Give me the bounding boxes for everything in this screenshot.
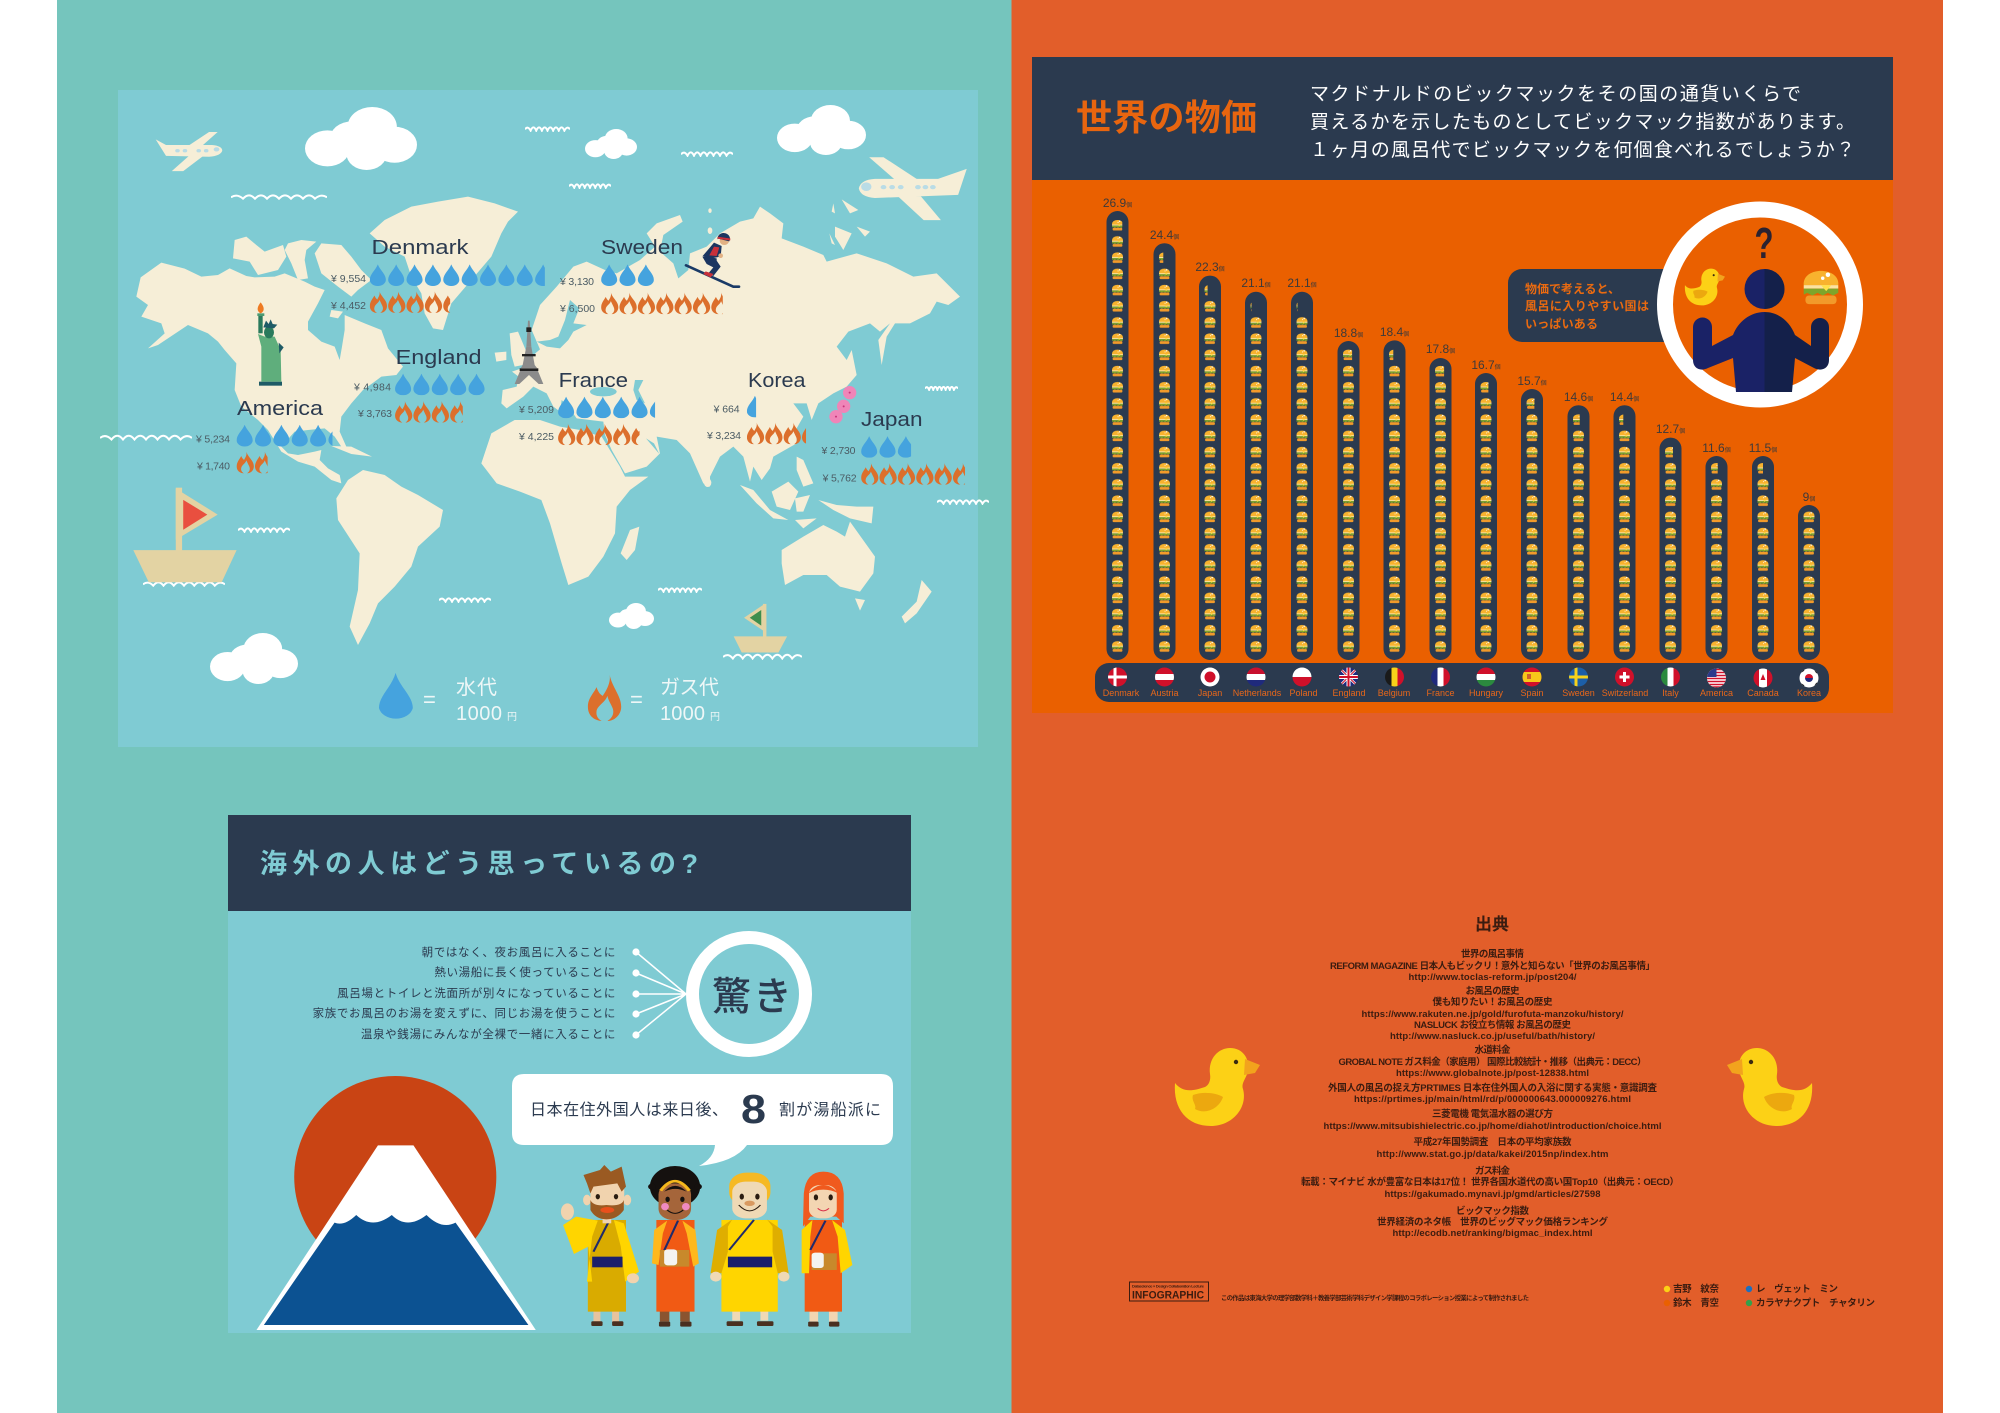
intro text: 買えるかを示したものとしてビックマック指数があります。 [1310, 111, 1855, 133]
sources list: NASLUCK お役立ち情報 お風呂の歴史 [1414, 1019, 1571, 1031]
icon: plane large [859, 157, 967, 220]
panel: orange background [1012, 0, 1943, 1413]
flag labels: Belgium [1378, 688, 1410, 698]
sources list: 三菱電機 電気温水器の選び方 [1432, 1108, 1553, 1120]
bar: Italy 12.7: 12.7個 [1656, 422, 1685, 436]
flag labels: Japan [1198, 688, 1222, 698]
surprise list: 朝ではなく、夜お風呂に入ることに [422, 946, 616, 959]
sources list [1301, 948, 1679, 1239]
sources list: 世界経済のネタ帳 世界のビッグマック価格ランキング [1377, 1216, 1608, 1228]
surprise ring [692, 938, 806, 1050]
flag labels [1103, 688, 1821, 698]
waves [100, 127, 989, 659]
bar: America 11.6 [1702, 441, 1731, 660]
bar: Poland 21.1 [1287, 276, 1317, 660]
heading: 海外の人はどう思っているの? [260, 849, 698, 879]
icon: cherry blossoms [829, 386, 856, 423]
sources list: 転載：マイナビ 水が豊富な日本は17位！ 世界各国水道代の高い国Top10（出典元：OECD） [1301, 1176, 1679, 1188]
flag labels: Italy [1662, 688, 1679, 698]
icon: eiffel tower [515, 321, 543, 384]
amounts: ¥ 6,500 [559, 303, 595, 315]
speech bubble: 日本在住外国人は来日後、 [530, 1101, 728, 1119]
icon: small boat [734, 604, 787, 652]
amounts: ¥ 4,984 [353, 382, 391, 394]
flag labels: Sweden [1562, 688, 1595, 698]
icon: legend flame [588, 675, 621, 721]
bar: Poland 21.1: 21.1個 [1287, 276, 1317, 290]
speech bubble: 割が湯船派に [779, 1101, 881, 1119]
heading bar [1032, 57, 1893, 180]
sources list: 世界の風呂事情 [1461, 948, 1524, 960]
bar: Spain 15.7: 15.7個 [1517, 374, 1547, 388]
footer logo [1130, 1282, 1208, 1302]
sources list: https://www.globalnote.jp/post-12838.html [1396, 1068, 1589, 1079]
flag strip [1095, 663, 1829, 702]
sources list: 外国人の風呂の捉え方PRTIMES 日本在住外国人の入浴に関する実態・意識調査 [1328, 1082, 1657, 1094]
country names: France [559, 370, 628, 392]
sources list: https://prtimes.jp/main/html/rd/p/000000643.000009276.html [1354, 1094, 1631, 1105]
bar: America 11.6: 11.6個 [1702, 441, 1731, 455]
bar: Japan 22.3: 22.3個 [1195, 260, 1225, 274]
chart: water and gas rows [237, 264, 970, 485]
flag labels: Hungary [1469, 688, 1504, 698]
country names: Korea [748, 370, 806, 392]
icon: plane small [156, 132, 222, 171]
person: blond man [710, 1173, 789, 1326]
amounts: ¥ 3,234 [706, 430, 741, 442]
bar: Japan 22.3 [1195, 260, 1225, 660]
sources list: 水道料金 [1474, 1044, 1511, 1056]
flag labels: Netherlands [1233, 688, 1282, 698]
country names: America [237, 398, 324, 420]
surprise list: 熱い湯船に長く使っていることに [434, 965, 616, 979]
bar: Sweden 14.6 [1564, 390, 1593, 660]
icon: legend drop [379, 673, 413, 719]
amounts: ¥ 3,763 [357, 408, 392, 420]
callout bubble: 風呂に入りやすい国は [1525, 299, 1649, 313]
panel: opinions from abroad [228, 815, 911, 1333]
bar: France 17.8 [1426, 342, 1455, 660]
icon: statue of liberty [257, 302, 284, 386]
footer note: この作品は東海大学の理学部数学科＋教養学部芸術学科デザイン学課程のコラボレーション授業によって制作されました [1221, 1293, 1529, 1302]
surprise list: 風呂場とトイレと洗面所が別々になっていることに [337, 986, 616, 1000]
credits: カラヤナクプト チャタリン [1756, 1297, 1875, 1309]
bar: Hungary 16.7: 16.7個 [1471, 358, 1501, 372]
flag labels: America [1700, 688, 1733, 698]
surprise list: 家族でお風呂のお湯を変えずに、同じお湯を使うことに [313, 1006, 616, 1020]
intro text: １ヶ月の風呂代でビックマックを何個食べれるでしょうか？ [1310, 139, 1855, 161]
bar: Denmark 26.9: 26.9個 [1103, 196, 1132, 210]
legend: 円 [710, 712, 720, 723]
speech bubble: 8 [741, 1086, 766, 1132]
clouds [210, 105, 866, 684]
footer logo: Datascience × Design Collaboration Lecture [1132, 1284, 1205, 1288]
mount fuji [256, 1076, 536, 1330]
amounts [195, 273, 857, 485]
sources list: http://www.nasluck.co.jp/useful/bath/history/ [1390, 1031, 1595, 1042]
sources list: https://www.mitsubishielectric.co.jp/home/diahot/introduction/choice.html [1324, 1121, 1662, 1132]
bar: Sweden 14.6: 14.6個 [1564, 390, 1593, 404]
chart: burgers per bath cost [1103, 196, 1820, 660]
bar: Spain 15.7 [1517, 374, 1547, 660]
heading: 世界の物価 [1076, 97, 1257, 138]
bar: France 17.8: 17.8個 [1426, 342, 1455, 356]
panel: world map [100, 90, 989, 747]
callout bubble [1508, 269, 1688, 342]
bar: Italy 12.7 [1656, 422, 1685, 660]
bar: Denmark 26.9 [1103, 196, 1132, 660]
country names: Denmark [372, 237, 470, 259]
legend: 1000 [660, 703, 705, 725]
bar: Switzerland 14.4: 14.4個 [1610, 390, 1639, 404]
flag labels: Korea [1797, 688, 1821, 698]
illustration: mount fuji and people [256, 1076, 852, 1330]
connectors [632, 948, 686, 1039]
sources list: 僕も知りたい！お風呂の歴史 [1432, 996, 1553, 1008]
bar: England 18.8: 18.8個 [1334, 326, 1363, 340]
illustration: person thinking [1665, 210, 1855, 400]
person: woman with curly hair [648, 1166, 702, 1327]
flag labels: Spain [1520, 688, 1544, 698]
legend: 1000 [456, 703, 502, 725]
flag labels: England [1332, 688, 1366, 698]
map illustrations [133, 132, 970, 721]
footer logo: INFOGRAPHIC [1132, 1290, 1204, 1302]
bar: Netherlands 21.1 [1241, 276, 1271, 660]
surprise ring: 驚き [712, 976, 792, 1019]
amounts: ¥ 9,554 [330, 273, 366, 285]
legend: 水代 [456, 676, 497, 699]
legend: ガス代 [660, 676, 719, 699]
callout bubble: いっぱいある [1525, 317, 1598, 331]
bar: Austria 24.4 [1150, 228, 1179, 660]
icon: rubber duck left [1175, 1048, 1260, 1126]
flag labels: Poland [1289, 688, 1318, 698]
callout bubble: 物価で考えると、 [1525, 281, 1620, 296]
amounts: ¥ 4,225 [518, 431, 554, 443]
person: bearded man [561, 1165, 639, 1326]
legend [423, 676, 720, 725]
bar: Korea 9 [1798, 490, 1820, 660]
intro text: マクドナルドのビックマックをその国の通貨いくらで [1310, 83, 1801, 105]
icon: large boat [133, 488, 237, 582]
illustration: person thinking: ? [1754, 219, 1774, 268]
sources list: https://www.rakuten.ne.jp/gold/furofuta-manzoku/history/ [1362, 1009, 1624, 1020]
legend: 円 [507, 712, 517, 723]
bar: Korea 9: 9個 [1803, 490, 1815, 504]
bar: Switzerland 14.4 [1610, 390, 1639, 660]
flag labels: Canada [1747, 688, 1779, 698]
sources list: http://www.toclas-reform.jp/post204/ [1408, 972, 1577, 983]
bar: Belgium 18.4: 18.4個 [1380, 325, 1409, 339]
bar: Belgium 18.4 [1380, 325, 1409, 660]
sources list: 平成27年国勢調査 日本の平均家族数 [1414, 1136, 1572, 1148]
amounts: ¥ 5,234 [195, 434, 230, 446]
speech bubble [512, 1074, 893, 1166]
amounts: ¥ 5,209 [518, 404, 554, 416]
country names: Japan [861, 409, 922, 431]
flag labels: Austria [1150, 688, 1179, 698]
country names [237, 237, 922, 431]
amounts: ¥ 4,452 [330, 300, 366, 312]
amounts: ¥ 1,740 [196, 460, 230, 472]
bar: Netherlands 21.1: 21.1個 [1241, 276, 1271, 290]
bar: Canada 11.5 [1749, 441, 1777, 660]
sources list: http://www.stat.go.jp/data/kakei/2015np/index.htm [1376, 1149, 1608, 1160]
sources list: お風呂の歴史 [1466, 985, 1520, 997]
country names: England [396, 347, 482, 369]
credits: レ ヴェット ミン [1756, 1283, 1838, 1295]
panel: teal background [57, 0, 1012, 1413]
land: eurasia, africa and oceania [481, 199, 960, 623]
amounts: ¥ 3,130 [559, 276, 594, 288]
sources list: ガス料金 [1475, 1165, 1510, 1177]
country names: Sweden [601, 237, 683, 259]
credits [1664, 1283, 1875, 1309]
sources list: https://gakumado.mynavi.jp/gmd/articles/27598 [1384, 1189, 1600, 1200]
amounts: ¥ 5,762 [822, 473, 857, 485]
bar: Hungary 16.7 [1471, 358, 1501, 660]
surprise list [313, 946, 616, 1041]
bar: Canada 11.5: 11.5個 [1749, 441, 1777, 455]
credits: 吉野 紋奈 [1673, 1283, 1719, 1295]
credits: 鈴木 青空 [1673, 1297, 1719, 1309]
bar: England 18.8 [1334, 326, 1363, 660]
amounts: ¥ 2,730 [820, 445, 856, 457]
land: americas and greenland [136, 197, 531, 645]
sources list: ビックマック指数 [1456, 1205, 1529, 1217]
flag labels: Denmark [1103, 688, 1140, 698]
amounts: ¥ 664 [713, 404, 740, 416]
sources list: GROBAL NOTE ガス料金（家庭用） 国際比較統計・推移（出典元：DECC） [1338, 1056, 1646, 1068]
surprise list: 温泉や銭湯にみんなが全裸で一緒に入ることに [361, 1027, 616, 1041]
intro text [1310, 83, 1855, 161]
sources list: http://ecodb.net/ranking/bigmac_index.html [1392, 1228, 1592, 1239]
heading bar [228, 815, 911, 911]
flag labels: France [1426, 688, 1455, 698]
flag labels: Switzerland [1602, 688, 1648, 698]
icon: skier [686, 233, 739, 287]
legend: = [423, 687, 436, 712]
sources heading: 出典 [1475, 915, 1509, 934]
panel: big mac index [1032, 57, 1893, 713]
sources list: REFORM MAGAZINE 日本人もビックリ！意外と知らない「世界のお風呂事情」 [1330, 960, 1655, 972]
icon: rubber duck right [1727, 1048, 1812, 1126]
legend: = [630, 687, 643, 712]
person: red-haired woman [802, 1172, 852, 1327]
bar: Austria 24.4: 24.4個 [1150, 228, 1179, 242]
